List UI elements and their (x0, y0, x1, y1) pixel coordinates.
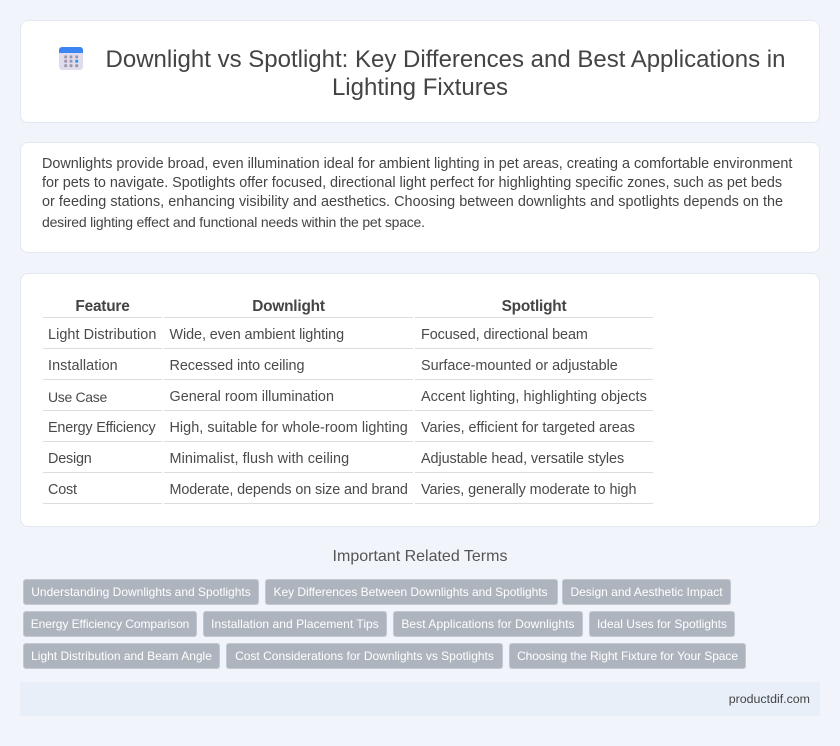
tag: Key Differences Between Downlights and Spotlights (274, 585, 547, 599)
tag: Installation and Placement Tips (211, 617, 379, 631)
table row: Installation: Recessed into ceiling (170, 358, 304, 374)
table row: Installation: Installation (48, 358, 118, 374)
table row: Installation (48, 358, 618, 374)
table row: Installation: Surface-mounted or adjustable (421, 358, 618, 374)
tag (589, 611, 735, 637)
tag: Ideal Uses for Spotlights (597, 617, 727, 631)
table row: Light Distribution: Wide, even ambient lighting (170, 327, 344, 343)
title: Downlight vs Spotlight: Key Differences and Best Applications in (106, 46, 785, 73)
table row: Light Distribution: Light Distribution (48, 327, 156, 343)
tag (562, 579, 731, 605)
tag: Energy Efficiency Comparison (31, 617, 189, 631)
table row: Cost: Moderate, depends on size and brand (170, 482, 408, 498)
table row: Energy Efficiency: Energy Efficiency (48, 420, 156, 436)
table row: Cost: Varies, generally moderate to high (421, 482, 636, 498)
table row: Design: Adjustable head, versatile styles (421, 451, 624, 467)
text block: introduction: desired lighting effect and functional needs within the pet space. (42, 214, 425, 230)
table row: Design (48, 451, 624, 467)
footer bar (20, 682, 820, 716)
title: Lighting Fixtures (332, 74, 508, 101)
table row: Light Distribution (48, 327, 588, 343)
table row: Design: Design (48, 451, 92, 467)
tag (23, 643, 220, 669)
tag: Cost Considerations for Downlights vs Spotlights (235, 649, 494, 663)
footer text: productdif.com (729, 692, 810, 706)
tag (23, 611, 197, 637)
tag: Best Applications for Downlights (401, 617, 575, 631)
tag: Choosing the Right Fixture for Your Space (517, 649, 738, 663)
table row: Cost (48, 482, 636, 498)
text block: introduction: or feeding stations, enhancing visibility and aesthetics. Choosing between downlights and spotlights depends on the (42, 194, 783, 210)
tag: Understanding Downlights and Spotlights (31, 585, 251, 599)
table header: Spotlight: Spotlight (502, 298, 566, 315)
tag (265, 579, 558, 605)
table row: Energy Efficiency: Varies, efficient for targeted areas (421, 420, 635, 436)
table header: Downlight: Downlight (252, 298, 325, 315)
table row: Design: Minimalist, flush with ceiling (170, 451, 349, 467)
table row: Use Case: General room illumination (170, 389, 334, 405)
heading: related terms: Important Related Terms (333, 548, 507, 565)
title (106, 46, 785, 101)
panel: introduction (20, 142, 820, 253)
text block: introduction: Downlights provide broad, even illumination ideal for ambient lighting in pet areas, creating a comfortable environment (42, 156, 792, 172)
text block: introduction (42, 156, 792, 230)
tag (23, 579, 259, 605)
tag: Design and Aesthetic Impact (570, 585, 723, 599)
table row: Energy Efficiency (48, 420, 635, 436)
tag (509, 643, 746, 669)
table row: Use Case (48, 389, 647, 405)
table row: Use Case: Use Case (48, 389, 107, 405)
table row: Use Case: Accent lighting, highlighting objects (421, 389, 647, 405)
tag (393, 611, 583, 637)
table header: Feature: Feature (75, 298, 130, 315)
icon: calendar grid (59, 47, 83, 70)
tag: Light Distribution and Beam Angle (31, 649, 212, 663)
tag (203, 611, 387, 637)
table row: Cost: Cost (48, 482, 77, 498)
panel: comparison table (20, 273, 820, 527)
tag (226, 643, 503, 669)
text block: introduction: for pets to navigate. Spotlights offer focused, directional light perfect for highlighting specific zones, such as pet beds (42, 175, 782, 191)
table row: Light Distribution: Focused, directional beam (421, 327, 588, 343)
panel: title card (20, 20, 820, 123)
tags: related terms (23, 579, 746, 669)
table row: Energy Efficiency: High, suitable for whole-room lighting (170, 420, 408, 436)
